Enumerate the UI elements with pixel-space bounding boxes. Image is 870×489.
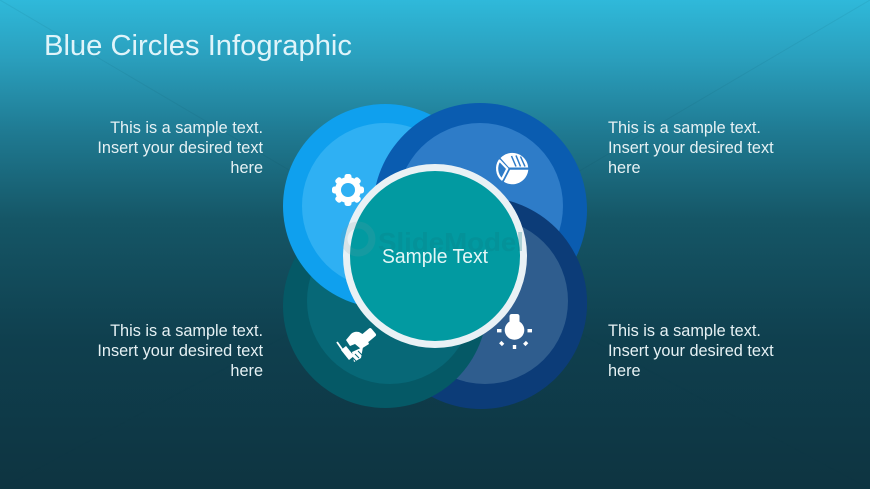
text block: bottom right: here — [608, 362, 641, 380]
circle: teal, bottom left — [283, 204, 487, 408]
text block: top right: This is a sample text. — [608, 119, 761, 137]
circle: light blue, top left — [283, 104, 487, 308]
icon: light bulb — [497, 314, 532, 349]
text block: bottom left: Insert your desired text — [97, 342, 263, 360]
text block: bottom right: Insert your desired text — [608, 342, 774, 360]
icon: handshake — [337, 327, 377, 362]
title: Blue Circles Infographic — [44, 30, 352, 62]
text block: top right: here — [608, 159, 641, 177]
text block: top left: Insert your desired text — [97, 139, 263, 157]
text block: top right: Insert your desired text — [608, 139, 774, 157]
center label: Sample Text — [382, 246, 488, 268]
text block: bottom left: This is a sample text. — [110, 322, 263, 340]
text block: top right — [608, 119, 774, 177]
text block: top left: here — [230, 159, 263, 177]
icon: gear — [332, 174, 364, 206]
circle: navy overlap over dark blue — [507, 200, 587, 330]
icon: pie chart — [497, 153, 528, 184]
text block: bottom right — [608, 322, 774, 380]
text block: bottom right: This is a sample text. — [608, 322, 761, 340]
circle: navy, bottom right — [375, 197, 587, 409]
circle: dark blue, top right — [373, 103, 587, 317]
text block: bottom left — [97, 322, 263, 380]
text block: bottom left: here — [230, 362, 263, 380]
text block: top left — [97, 119, 263, 177]
center circle — [346, 168, 524, 344]
text block: top left: This is a sample text. — [110, 119, 263, 137]
watermark: SlideModel — [378, 227, 524, 257]
